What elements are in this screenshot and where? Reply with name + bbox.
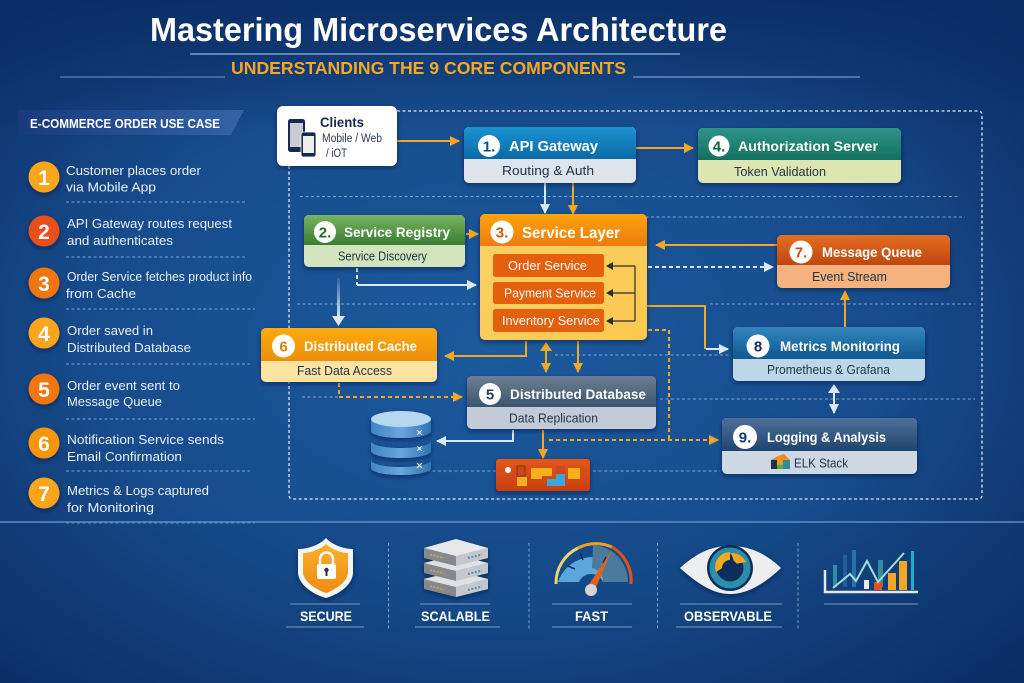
panel: distributed cache: 6 (279, 338, 288, 356)
step 2 (28, 216, 232, 248)
panel: clients (277, 106, 397, 166)
icon: phones (288, 119, 316, 157)
step 6: Email Confirmation (67, 449, 182, 464)
icon: orange data block (496, 459, 590, 491)
step 4 (28, 318, 191, 355)
use case banner (18, 110, 244, 135)
panel: distributed cache: Distributed Cache (304, 338, 417, 354)
panel: api gateway: Routing & Auth (502, 164, 594, 178)
architecture frame (289, 111, 982, 499)
step 1 (28, 162, 202, 194)
icon: elk stack (771, 454, 790, 469)
icon: database cylinder (371, 411, 431, 475)
step 1: Customer places order (66, 163, 202, 178)
label: scalable: SCALABLE (421, 608, 490, 624)
step 1: via Mobile App (66, 180, 156, 194)
panel: service registry: 2. (319, 224, 331, 242)
label: observable: OBSERVABLE (684, 608, 772, 624)
panel: use case list (18, 110, 255, 523)
step 5: Message Queue (67, 394, 162, 409)
panel: service layer: 3. (496, 224, 508, 242)
step 6: Notification Service sends (67, 432, 225, 447)
panel: authorization server: 4. (713, 138, 725, 156)
panel: service layer: Service Layer (522, 225, 620, 242)
step 4: 4 (38, 323, 50, 346)
panel: metrics monitoring (733, 327, 925, 381)
step 7: Metrics & Logs captured (67, 483, 209, 498)
panel: distributed database: Distributed Database (510, 386, 646, 402)
step 6: 6 (38, 433, 50, 456)
panel: logging and analysis: ELK Stack (794, 456, 849, 470)
bottom rule (0, 521, 1024, 523)
panel: message queue (777, 235, 950, 288)
panel: message queue: Message Queue (822, 244, 922, 260)
panel: metrics monitoring: Metrics Monitoring (780, 338, 900, 354)
panel: clients: / iOT (326, 148, 347, 160)
panel: distributed cache: Fast Data Access (297, 364, 392, 378)
icon: observable eye (680, 545, 781, 594)
step 4: Order saved in (67, 323, 153, 338)
step 3 (28, 268, 252, 301)
use case banner: E-COMMERCE ORDER USE CASE (30, 117, 220, 131)
panel: clients: Mobile / Web (322, 133, 382, 145)
panel: distributed cache (261, 328, 437, 382)
step 7 (28, 478, 209, 515)
panel: distributed database: Data Replication (509, 412, 598, 426)
panel: message queue: Event Stream (812, 270, 887, 284)
inventory service: Inventory Service (502, 314, 600, 328)
order service: Order Service (508, 259, 587, 273)
order service (493, 254, 604, 277)
panel: distributed database (467, 376, 656, 429)
panel: logging and analysis: 9. (739, 430, 751, 446)
icon: growth chart (825, 550, 918, 592)
icon: secure shield (298, 538, 353, 598)
inventory service (493, 309, 604, 332)
arrows (332, 141, 845, 458)
payment service (493, 282, 604, 304)
panel: service registry (304, 215, 465, 267)
panel: logging and analysis: Logging & Analysis (767, 429, 886, 445)
panel: api gateway: API Gateway (509, 138, 599, 155)
step 2: API Gateway routes request (67, 216, 232, 231)
panel: logging and analysis (722, 418, 917, 474)
step 5 (28, 374, 180, 409)
icon: scalable servers (424, 539, 488, 597)
label: secure: SECURE (300, 608, 352, 624)
step 4: Distributed Database (67, 340, 191, 355)
panel: api gateway (464, 127, 636, 183)
step 5: Order event sent to (67, 378, 180, 393)
panel: authorization server (698, 128, 901, 183)
panel: service registry: Service Discovery (338, 250, 428, 264)
step 3: from Cache (66, 286, 136, 301)
step 7: 7 (38, 483, 50, 506)
subtitle: UNDERSTANDING THE 9 CORE COMPONENTS (231, 58, 626, 78)
payment service: Payment Service (504, 286, 596, 300)
panel: service layer (480, 214, 647, 340)
icon: fast gauge (556, 544, 631, 596)
title: Mastering Microservices Architecture (150, 11, 727, 48)
panel: authorization server: Token Validation (734, 165, 826, 179)
panel: metrics monitoring: 8 (754, 338, 762, 356)
step 7: for Monitoring (67, 500, 154, 515)
step 3: Order Service fetches product info (67, 269, 252, 284)
step 2: and authenticates (67, 233, 174, 248)
step 2: 2 (38, 221, 50, 244)
step 5: 5 (38, 379, 50, 402)
panel: service registry: Service Registry (344, 224, 450, 240)
panel: authorization server: Authorization Server (738, 138, 879, 154)
panel: message queue: 7. (795, 244, 807, 262)
step 6 (28, 428, 225, 464)
panel: api gateway: 1. (483, 138, 495, 156)
step 1: 1 (38, 167, 50, 190)
panel: clients: Clients (320, 114, 364, 130)
panel: metrics monitoring: Prometheus & Grafana (767, 363, 890, 377)
internal connectors (606, 262, 635, 325)
panel: distributed database: 5 (486, 386, 494, 404)
step 3: 3 (38, 273, 50, 296)
label: fast: FAST (575, 608, 608, 624)
